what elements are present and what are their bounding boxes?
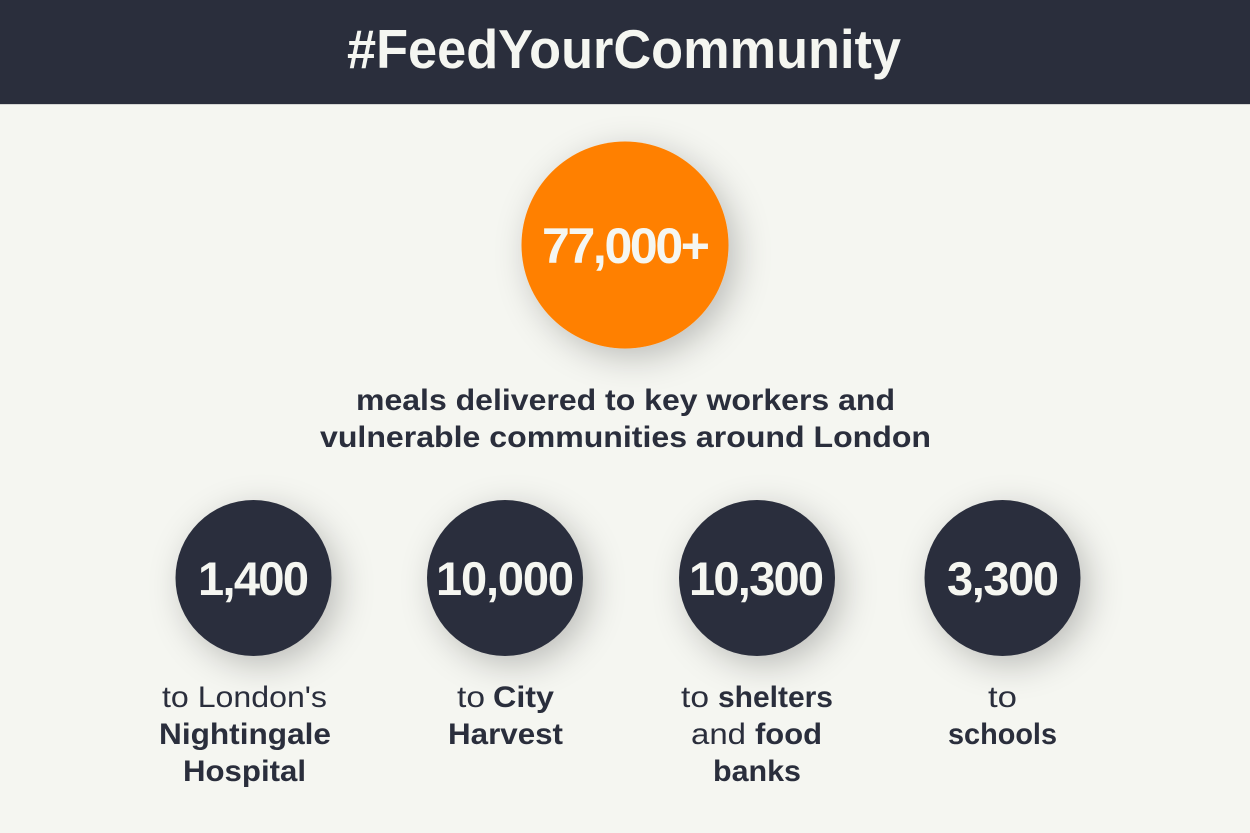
stat circle: 10,000: 10,000: [436, 552, 574, 605]
title: #FeedYourCommunity: [347, 18, 901, 80]
label: shelters and food banks: banks: [713, 755, 801, 788]
label: City Harvest: [448, 681, 563, 751]
label: City Harvest: City: [493, 681, 554, 714]
label: Nightingale Hospital: to London's: [162, 681, 327, 714]
meals description: meals delivered to key workers and: [356, 384, 895, 417]
label: schools: to: [988, 681, 1017, 714]
label: shelters and food banks: to: [681, 681, 709, 714]
label: schools: [948, 681, 1057, 751]
meals description: vulnerable communities around London: [320, 421, 931, 454]
orange circle: 77,000+: [522, 142, 728, 348]
stat circle: 10,300: 10,300: [689, 552, 824, 605]
label: schools: schools: [948, 718, 1057, 751]
label: Nightingale Hospital: [159, 681, 331, 788]
stat circle: 3,300: [924, 500, 1080, 656]
orange circle: 77,000+: 77,000+: [542, 218, 710, 274]
label: shelters and food banks: food: [755, 718, 822, 751]
stat circle: 1,400: 1,400: [198, 552, 309, 605]
meals description: [320, 384, 931, 454]
stat circle: 3,300: 3,300: [947, 552, 1059, 605]
stat circle: 1,400: [176, 500, 332, 656]
stat circle: 10,000: [427, 500, 583, 656]
label: Nightingale Hospital: Hospital: [183, 755, 306, 788]
stat circle: 10,300: [679, 500, 835, 656]
label: City Harvest: Harvest: [448, 718, 563, 751]
label: shelters and food banks: shelters: [718, 681, 833, 714]
label: shelters and food banks: [681, 681, 833, 788]
label: shelters and food banks: and: [691, 718, 746, 751]
label: City Harvest: to: [457, 681, 485, 714]
header banner: [0, 0, 1250, 104]
label: Nightingale Hospital: Nightingale: [159, 718, 331, 751]
